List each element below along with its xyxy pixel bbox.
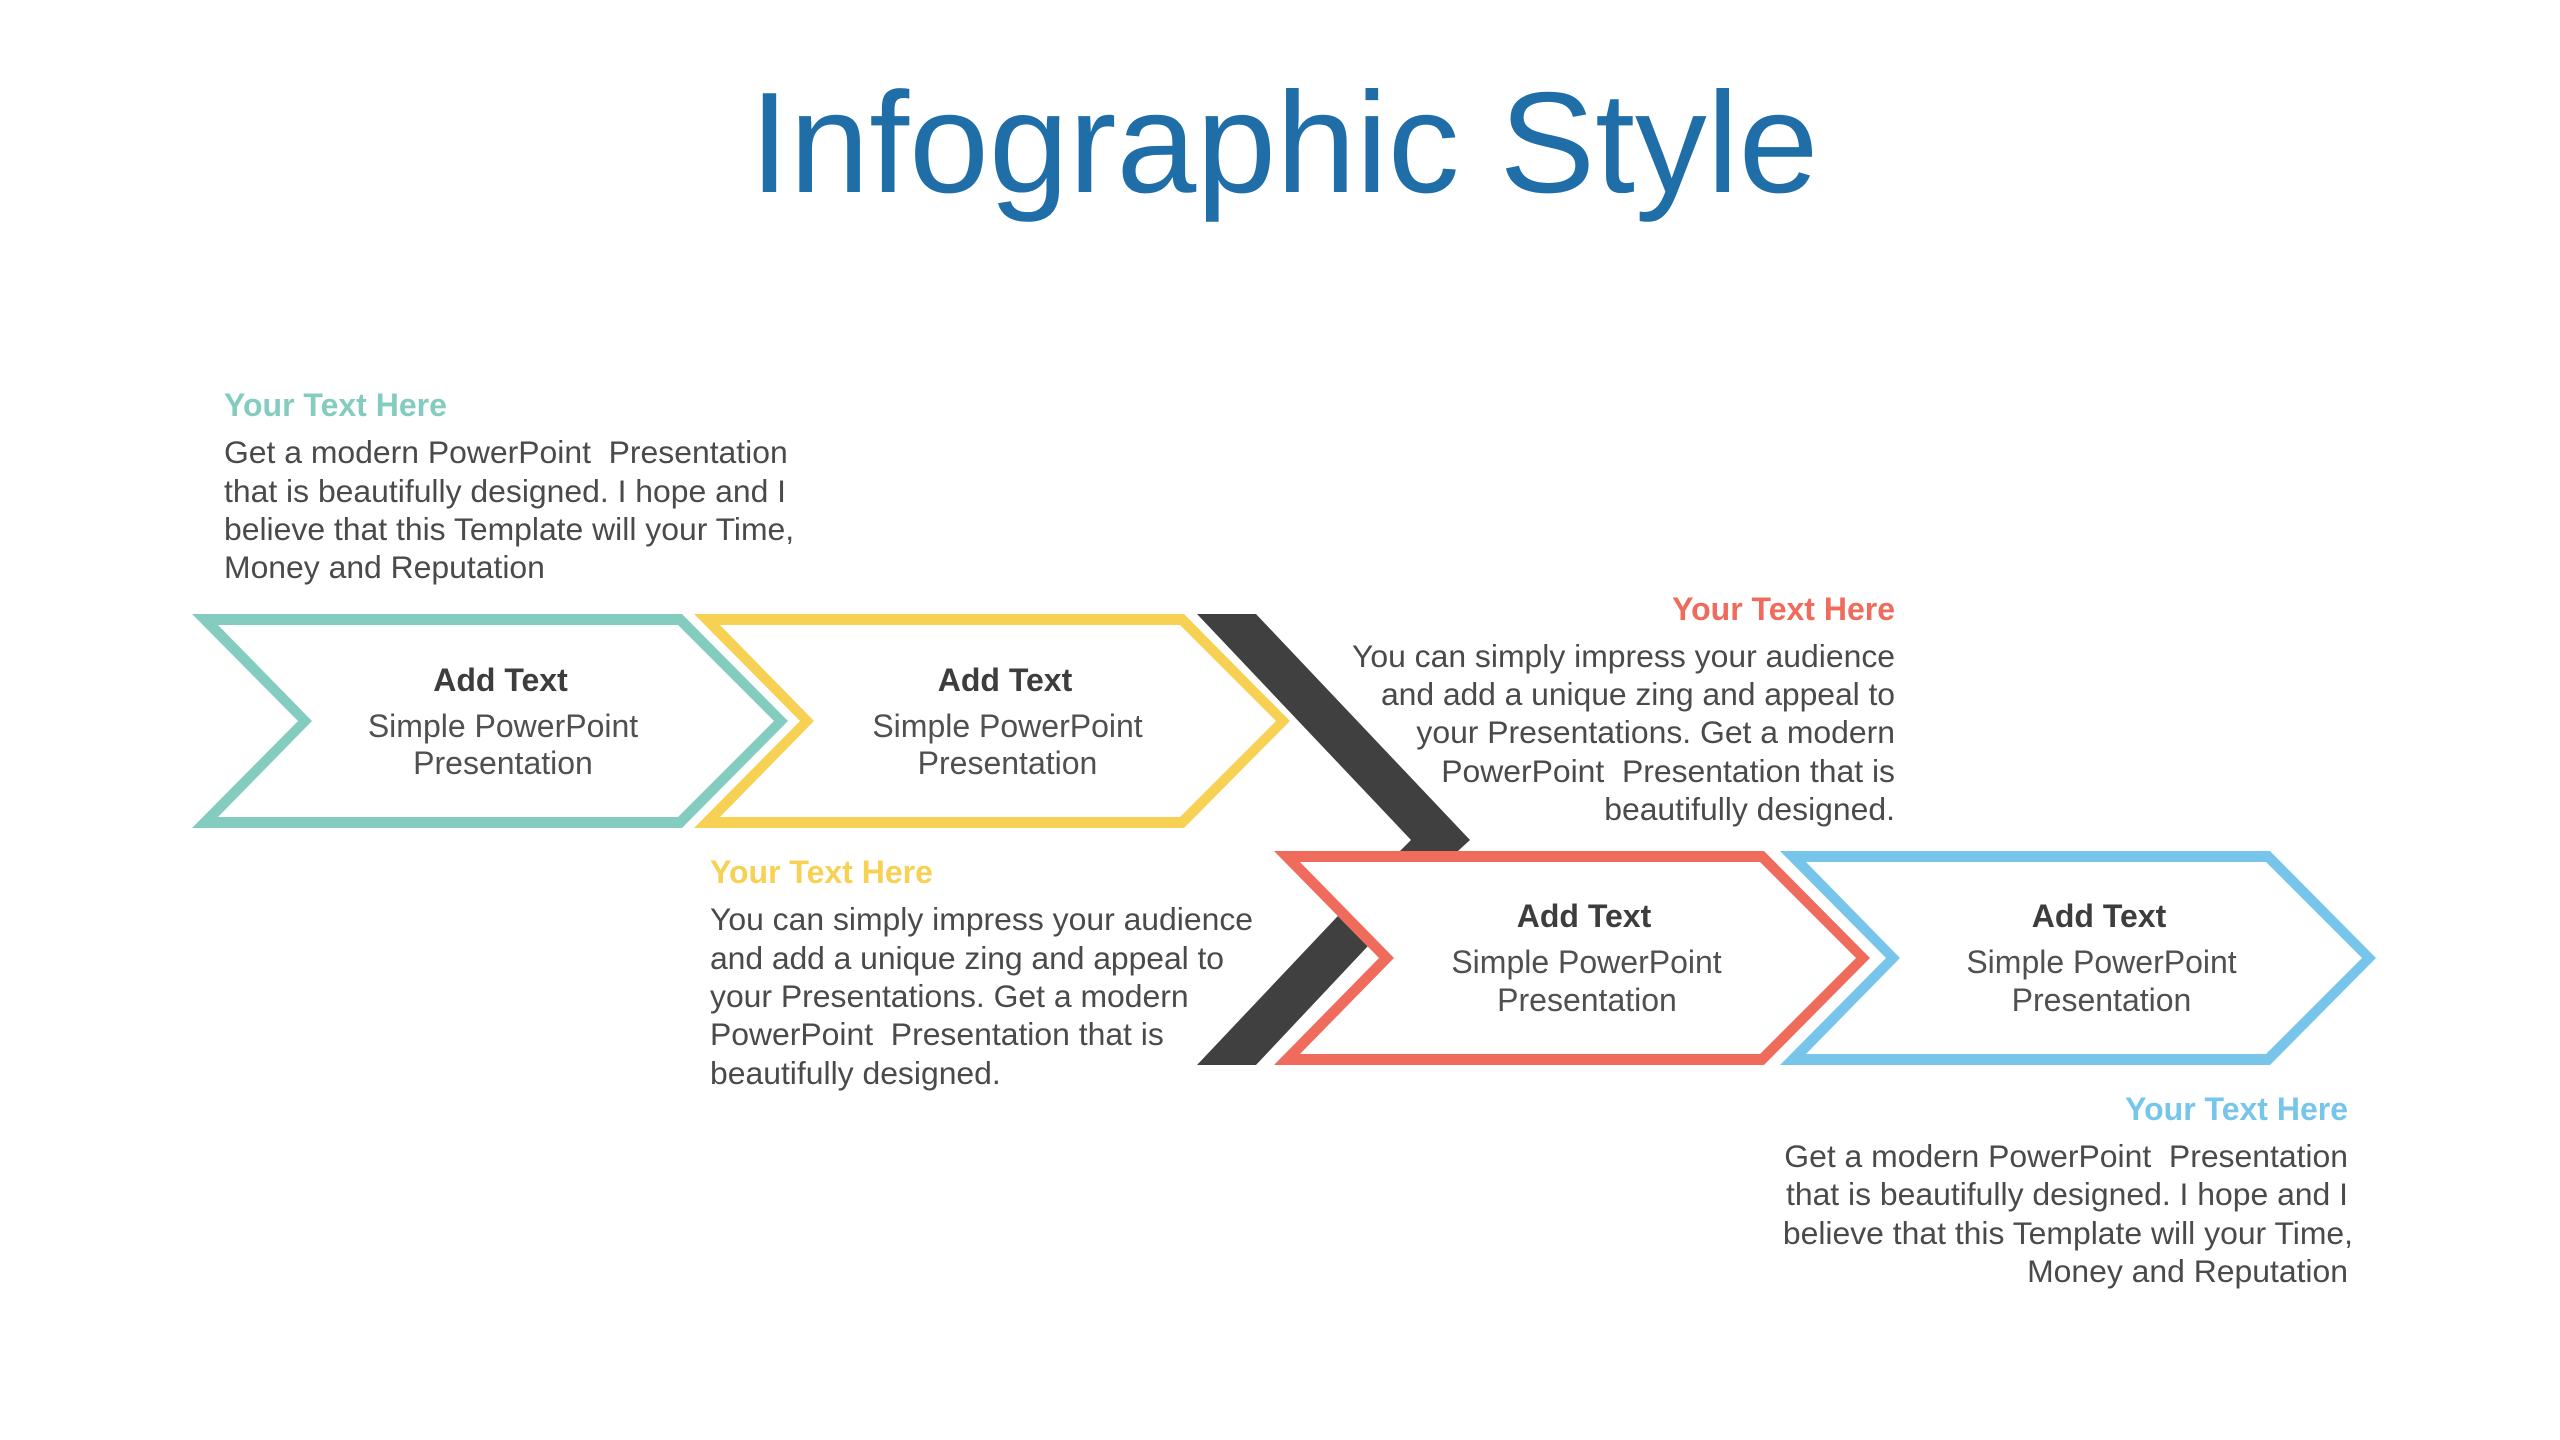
text block: red note xyxy=(1352,591,1895,827)
text block: yellow note: beautifully designed. xyxy=(710,1055,1001,1091)
text block: teal note xyxy=(224,387,794,585)
text block: red note: your Presentations. Get a modern xyxy=(1416,714,1895,750)
teal chevron text: Simple PowerPoint xyxy=(368,708,638,744)
text block: teal note: Money and Reputation xyxy=(224,549,545,585)
yellow chevron text: Presentation xyxy=(918,745,1097,781)
panel: teal chevron xyxy=(192,614,788,828)
text block: yellow note: You can simply impress your audience xyxy=(710,901,1253,937)
blue chevron text: Presentation xyxy=(2012,982,2191,1018)
text block: red note: and add a unique zing and appeal to xyxy=(1381,676,1895,712)
yellow chevron text: Simple PowerPoint xyxy=(872,708,1143,744)
red chevron text xyxy=(1451,898,1722,1018)
panel: red chevron xyxy=(1274,851,1870,1065)
text block: red note: You can simply impress your audience xyxy=(1352,638,1895,674)
text block: blue note: believe that this Template will your Time, xyxy=(1783,1215,2353,1251)
teal chevron text: Add Text xyxy=(433,662,568,698)
text block: teal note: Your Text Here xyxy=(224,387,447,423)
teal chevron text xyxy=(368,662,638,781)
text block: yellow note: PowerPoint Presentation that is xyxy=(710,1016,1164,1052)
red chevron text: Add Text xyxy=(1517,898,1652,934)
text block: red note: Your Text Here xyxy=(1672,591,1895,627)
blue chevron text: Add Text xyxy=(2032,898,2167,934)
text block: red note: beautifully designed. xyxy=(1604,791,1895,827)
blue chevron text xyxy=(1966,898,2237,1018)
text block: yellow note xyxy=(710,854,1253,1091)
text block: red note: PowerPoint Presentation that is xyxy=(1441,753,1895,789)
text block: teal note: that is beautifully designed. I hope and I xyxy=(224,473,786,509)
connector: dark zigzag band xyxy=(1197,614,1470,1065)
red chevron text: Presentation xyxy=(1497,982,1677,1018)
yellow chevron text: Add Text xyxy=(938,662,1073,698)
red chevron text: Simple PowerPoint xyxy=(1451,944,1722,980)
yellow chevron text xyxy=(872,662,1143,781)
text block: yellow note: your Presentations. Get a modern xyxy=(710,978,1189,1014)
text block: yellow note: and add a unique zing and appeal to xyxy=(710,940,1224,976)
blue chevron text: Simple PowerPoint xyxy=(1966,944,2237,980)
text block: blue note: Money and Reputation xyxy=(2027,1253,2348,1289)
text block: yellow note: Your Text Here xyxy=(710,854,933,890)
panel: blue chevron xyxy=(1780,851,2376,1065)
text block: blue note: Your Text Here xyxy=(2125,1091,2348,1127)
title: Infographic Style xyxy=(750,63,1818,223)
text block: teal note: Get a modern PowerPoint Presentation xyxy=(224,434,788,470)
teal chevron text: Presentation xyxy=(413,745,593,781)
text block: blue note: that is beautifully designed. I hope and I xyxy=(1786,1176,2348,1212)
panel: yellow chevron xyxy=(694,614,1290,828)
text block: blue note xyxy=(1783,1091,2353,1289)
text block: blue note: Get a modern PowerPoint Presentation xyxy=(1784,1138,2348,1174)
text block: teal note: believe that this Template will your Time, xyxy=(224,511,794,547)
